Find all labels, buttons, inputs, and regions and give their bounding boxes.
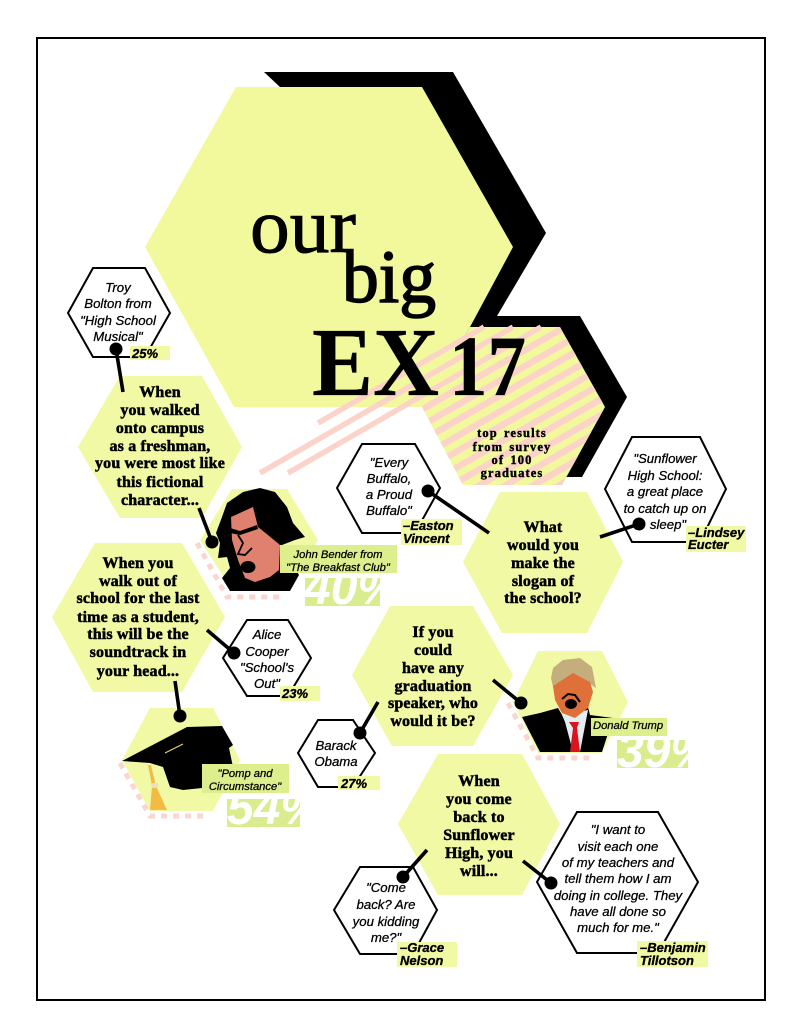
- answer: visit teachers: –Benjamin: [640, 940, 706, 955]
- answer: Troy Bolton: Bolton from: [84, 296, 152, 311]
- answer: visit teachers: Tillotson: [640, 953, 694, 968]
- answer: Alice Cooper: [223, 620, 320, 701]
- question hexagon: come back: Sunflower: [443, 827, 515, 844]
- subtitle: of 100: [492, 453, 532, 467]
- answer: visit teachers: have all done so: [570, 904, 666, 919]
- answer: Troy Bolton: [68, 268, 170, 361]
- connectors: [110, 342, 646, 890]
- title hexagon: [145, 87, 513, 407]
- question hexagon: freshman: you were most like: [95, 455, 225, 472]
- striped hexagon: [258, 324, 605, 485]
- answer: Come back: –Grace: [400, 940, 444, 955]
- title text: EX: [312, 309, 439, 416]
- title text: our: [250, 182, 356, 269]
- question hexagon: speaker: could: [414, 642, 452, 659]
- answer: visit teachers: visit each one: [578, 839, 658, 854]
- answer: Sunflower High School: Eucter: [688, 537, 729, 552]
- answer: Alice Cooper: Cooper: [245, 644, 289, 659]
- question hexagon: speaker: graduation: [394, 678, 472, 695]
- answer: Barack Obama: Obama: [314, 754, 358, 769]
- answer: Pomp and Circumstance: Circumstance": [209, 781, 282, 793]
- answer: visit teachers: "I want to: [591, 822, 645, 837]
- question hexagon: soundtrack: school for the last: [76, 590, 200, 607]
- question hexagon: slogan: slogan of: [512, 573, 575, 590]
- answer: visit teachers: tell them how I am: [564, 871, 672, 886]
- answer: Sunflower High School: –Lindsey: [688, 525, 745, 540]
- subtitle: from survey: [473, 440, 551, 454]
- answer: Come back: me?": [371, 930, 402, 945]
- question hexagon: come back: High, you: [445, 845, 513, 862]
- answer: Pomp and Circumstance: "Pomp and: [218, 768, 273, 780]
- answer: visit teachers: of my teachers and: [562, 855, 675, 870]
- question hexagon: soundtrack: your head...: [97, 663, 179, 680]
- answer: Troy Bolton: 25%: [131, 346, 158, 361]
- question hexagon: come back: When: [458, 773, 500, 790]
- answer: Every Buffalo: Vincent: [403, 531, 450, 546]
- question hexagon: come back: [398, 754, 560, 895]
- answer: Every Buffalo: –Easton: [403, 518, 454, 533]
- answer: Donald Trump: 39%: [617, 725, 713, 778]
- subtitle: top results: [477, 426, 547, 440]
- title text: [250, 182, 526, 416]
- question hexagon: come back: will...: [460, 863, 498, 880]
- title text: big: [342, 236, 436, 319]
- answer: Barack Obama: [298, 720, 380, 791]
- answer: John Bender: 40%: [303, 562, 400, 615]
- answer: Every Buffalo: [337, 444, 462, 546]
- question hexagon: speaker: speaker, who: [388, 695, 478, 712]
- question hexagon: soundtrack: walk out of: [99, 573, 178, 590]
- answer: Barack Obama: 27%: [340, 776, 367, 791]
- subtitle: [473, 426, 551, 480]
- answer: Come back: "Come: [366, 880, 406, 895]
- answer: Every Buffalo: Buffalo": [366, 503, 413, 518]
- answer: Come back: Nelson: [400, 953, 443, 968]
- question hexagon: soundtrack: soundtrack in: [90, 644, 186, 661]
- question hexagon: soundtrack: this will be the: [87, 626, 189, 643]
- answer: Sunflower High School: "Sunflower: [633, 451, 697, 466]
- answer: Troy Bolton: "High School: [80, 313, 157, 328]
- question hexagon: soundtrack: time as a student,: [77, 609, 199, 626]
- answer: Every Buffalo: "Every: [370, 455, 410, 470]
- question hexagon: freshman: this fictional: [116, 474, 204, 491]
- subtitle: graduates: [481, 466, 543, 480]
- question hexagon: freshman: When: [139, 384, 181, 401]
- title text: 17: [449, 318, 526, 414]
- question hexagon: speaker: [352, 606, 513, 746]
- answer: Troy Bolton: Musical": [93, 329, 144, 344]
- answer: visit teachers: doing in college. They: [554, 888, 684, 903]
- question hexagon: slogan: make the: [511, 555, 575, 572]
- answer: John Bender: "The Breakfast Club": [286, 562, 391, 574]
- answer: John Bender: John Bender from: [293, 549, 382, 561]
- answer: Troy Bolton: Troy: [105, 280, 132, 295]
- question hexagon: freshman: as a freshman,: [110, 438, 210, 455]
- question hexagon: speaker: have any: [402, 660, 464, 677]
- answer: Alice Cooper: Alice: [252, 627, 281, 642]
- answer: Sunflower High School: a great place: [627, 484, 703, 499]
- question hexagon: slogan: the school?: [504, 590, 582, 607]
- answer: Donald Trump: Donald Trump: [593, 720, 663, 732]
- answer: Donald Trump: [506, 651, 688, 768]
- question hexagon: slogan: would you: [507, 537, 579, 554]
- answer: Alice Cooper: 23%: [281, 686, 308, 701]
- answer: Sunflower High School: sleep": [650, 517, 687, 532]
- answer: visit teachers: [537, 812, 708, 968]
- question hexagon: freshman: you walked: [120, 402, 200, 419]
- answer: Sunflower High School: to catch up on: [624, 501, 706, 516]
- question hexagon: soundtrack: When you: [102, 555, 174, 572]
- question hexagon: speaker: If you: [412, 624, 454, 641]
- question hexagon: come back: you come: [446, 791, 512, 808]
- question hexagon: slogan: [463, 492, 623, 633]
- answer: Alice Cooper: "School's: [240, 660, 294, 675]
- question hexagon: freshman: onto campus: [116, 420, 204, 437]
- answer: Pomp and Circumstance: 54%: [227, 782, 323, 835]
- question hexagon: slogan: What: [524, 519, 563, 536]
- question hexagon: freshman: [78, 376, 242, 518]
- title shadow: black hexagons: [264, 72, 627, 477]
- answer: John Bender: [197, 488, 400, 615]
- question hexagon: freshman: character...: [121, 492, 199, 509]
- question hexagon: soundtrack: [52, 543, 225, 692]
- question hexagon: speaker: would it be?: [390, 713, 476, 730]
- answer: Barack Obama: Barack: [315, 738, 358, 753]
- answer: Come back: back? Are: [357, 897, 415, 912]
- answer: visit teachers: much for me.": [577, 920, 660, 935]
- answer: Come back: you kidding: [352, 914, 420, 929]
- answer: Pomp and Circumstance: [118, 708, 300, 827]
- answer: Every Buffalo: Buffalo,: [367, 471, 411, 486]
- answer: Sunflower High School: High School:: [628, 468, 703, 483]
- answer: Sunflower High School: [605, 437, 746, 552]
- question hexagon: come back: back to: [453, 809, 505, 826]
- answer: Come back: [334, 867, 457, 968]
- answer: Every Buffalo: a Proud: [366, 487, 413, 502]
- answer: Alice Cooper: Out": [254, 676, 281, 691]
